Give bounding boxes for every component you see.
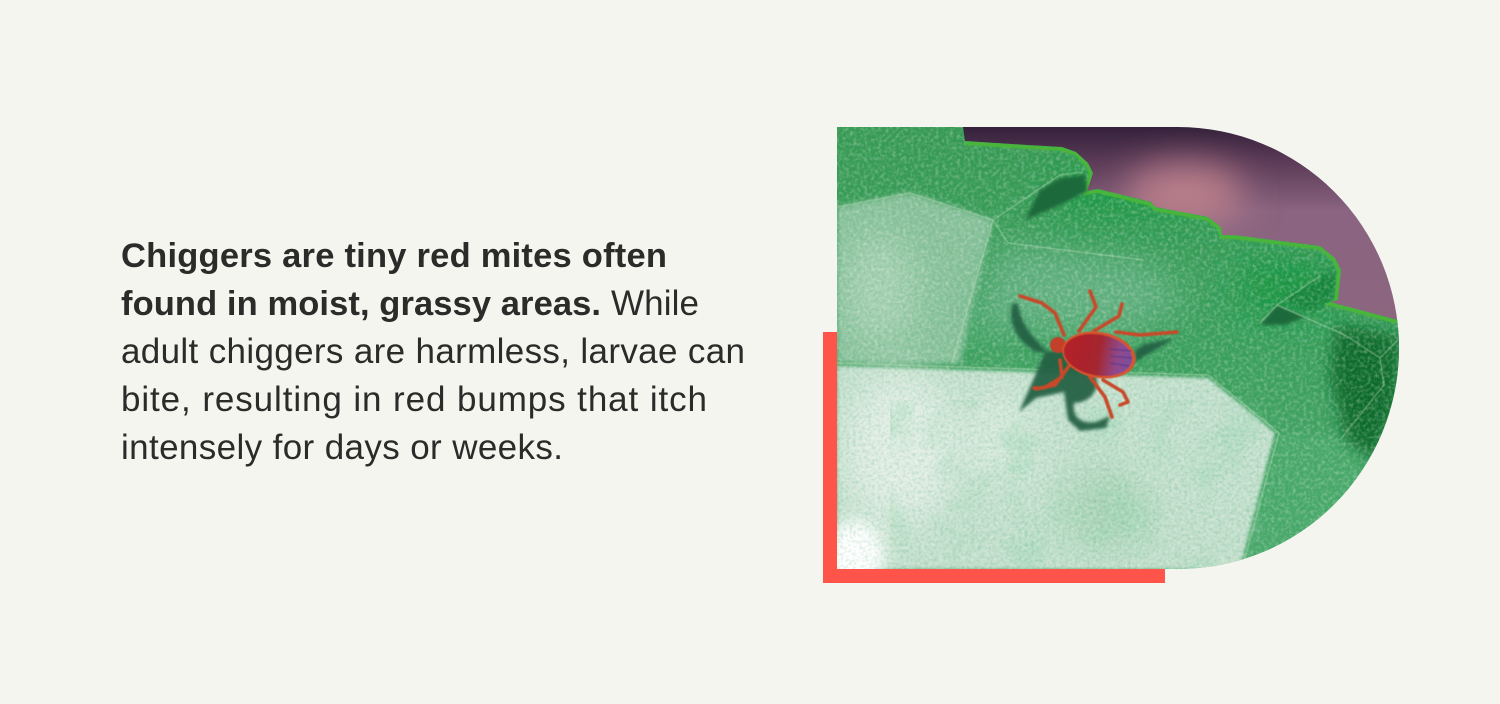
accent: red L-shaped bracket xyxy=(823,332,1165,583)
leaf: cast shadows on the surface xyxy=(1025,175,1305,325)
leaf: deep green shaded areas xyxy=(1060,170,1400,462)
line 2: bold end and regular start: While xyxy=(611,284,699,323)
line 2: bold end and regular start: found in moist, grassy areas. xyxy=(121,285,601,323)
line 5: intensely for days or weeks. xyxy=(121,428,563,467)
leaf xyxy=(825,127,1407,590)
chigger xyxy=(1020,291,1177,417)
line 3: adult chiggers are harmless, larvae can xyxy=(121,332,745,371)
chigger head xyxy=(1050,337,1066,353)
tick shadow xyxy=(1011,303,1175,431)
bold lead sentence, line 1: Chiggers are tiny red mites often xyxy=(121,237,667,275)
body text xyxy=(121,237,745,467)
line 4: bite, resulting in red bumps that itch xyxy=(121,380,707,419)
photo background: blurred purple backdrop xyxy=(963,127,1399,367)
leaf: bright rim along the serrated edge xyxy=(965,143,1398,322)
leaf: texture noise xyxy=(837,127,1407,572)
leaf: veins xyxy=(837,172,1398,569)
leaf: pale frosted patches xyxy=(825,193,1400,590)
photo: chigger on a green leaf, in D-shaped frame xyxy=(825,127,1407,590)
chigger body xyxy=(1062,330,1136,380)
chigger body stripes xyxy=(1110,349,1132,366)
chigger legs xyxy=(1020,291,1177,417)
leaf: mottled lower surface xyxy=(890,400,1260,573)
leaf: darker texture speckle xyxy=(837,127,1407,572)
